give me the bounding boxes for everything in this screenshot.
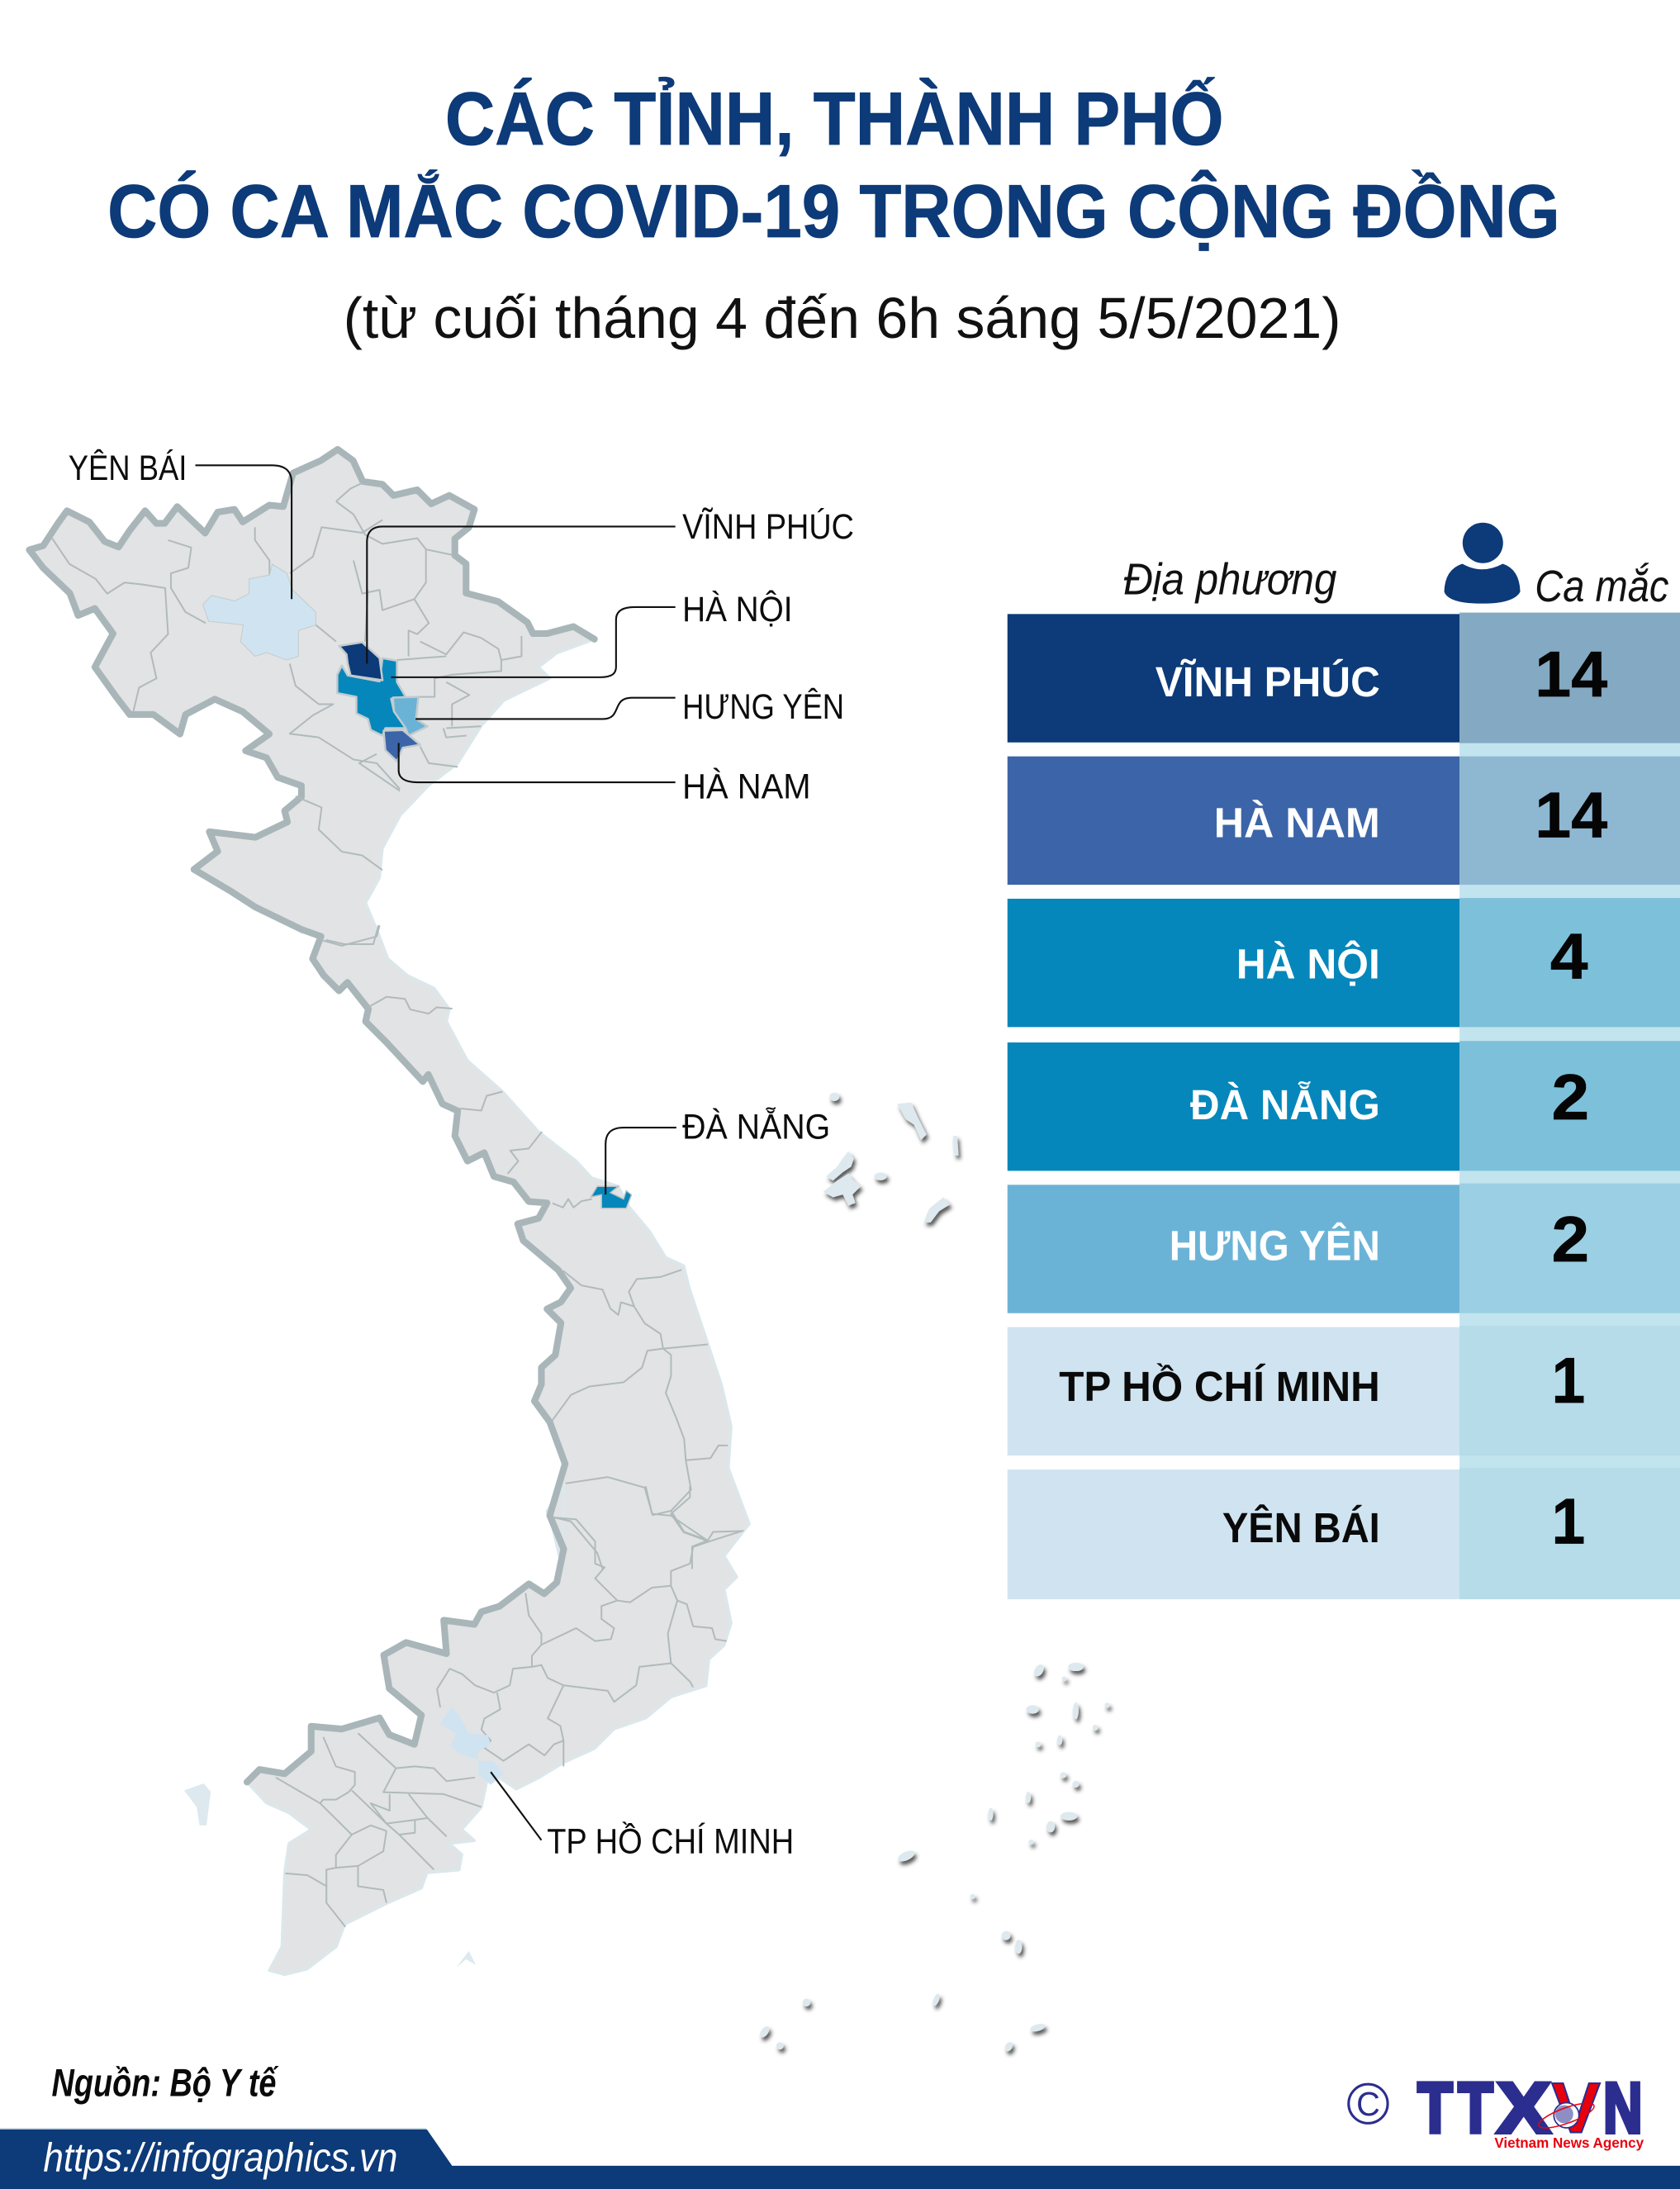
map labels: TP HỒ CHÍ MINH: [547, 1821, 794, 1861]
province: TP Hồ Chí Minh: [440, 1707, 504, 1785]
Phu Quoc and Con Dao islands: [184, 1783, 476, 1968]
footer bar: [0, 2129, 1680, 2189]
province: Hưng Yên: [393, 697, 428, 735]
internal province lines north: [52, 483, 521, 946]
highlighted provinces north: [203, 564, 428, 762]
province: Hà Nam: [383, 730, 420, 762]
map labels: HƯNG YÊN: [682, 687, 844, 726]
map labels: VĨNH PHÚC: [682, 507, 854, 546]
row: Hưng Yên: 2: [1552, 1204, 1589, 1275]
count column background: [1459, 613, 1680, 1599]
province: Yên Bái: [203, 564, 316, 660]
title: [107, 77, 1560, 254]
row: Hà Nam: [1008, 757, 1680, 885]
islands: Trường Sa: [758, 1663, 1110, 2053]
footer bar: https://infographics.vn: [43, 2136, 397, 2181]
leader lines: [196, 465, 676, 1840]
logo TTXVN: T: [1458, 2068, 1493, 2148]
row: Yên Bái: YÊN BÁI: [1222, 1504, 1380, 1551]
subtitle: (từ cuối tháng 4 đến 6h sáng 5/5/2021): [344, 286, 1341, 350]
row: Đà Nẵng: ĐÀ NẴNG: [1190, 1081, 1380, 1128]
islands: Hoàng Sa: [823, 1093, 959, 1223]
map labels: YÊN BÁI: [69, 449, 187, 487]
row: TP Hồ Chí Minh: 1: [1552, 1346, 1585, 1417]
title: CÁC TỈNH, THÀNH PHỐ: [445, 77, 1224, 161]
title: CÓ CA MẮC COVID-19 TRONG CỘNG ĐỒNG: [107, 169, 1560, 254]
row: Vĩnh Phúc: VĨNH PHÚC: [1156, 658, 1380, 705]
logo TTXVN: T: [1417, 2068, 1453, 2148]
table header: Địa phương: Địa phương: [1123, 555, 1336, 605]
row: Vĩnh Phúc: 14: [1535, 639, 1607, 710]
logo caption: Vietnam News Agency: [1494, 2134, 1644, 2151]
internal province lines centre: [326, 925, 743, 1569]
row: Đà Nẵng: 2: [1552, 1062, 1589, 1133]
row: Hà Nội: 4: [1550, 921, 1588, 992]
internal province lines south: [276, 1486, 743, 1927]
map labels: HÀ NỘI: [682, 590, 793, 629]
row: Hà Nội: HÀ NỘI: [1236, 940, 1380, 987]
row: Hà Nam: HÀ NAM: [1214, 800, 1380, 847]
icon: person: [1444, 523, 1521, 604]
row: Yên Bái: [1008, 1468, 1680, 1599]
province: Đà Nẵng: [591, 1186, 632, 1208]
copyright symbol: C: [1356, 2085, 1380, 2123]
row: Hưng Yên: [1008, 1184, 1680, 1313]
map labels: HÀ NAM: [682, 767, 811, 805]
row: TP Hồ Chí Minh: TP HỒ CHÍ MINH: [1059, 1363, 1380, 1410]
map of Vietnam: [29, 449, 1110, 2053]
land border: [29, 449, 595, 1782]
row: Hà Nội: [1008, 898, 1680, 1027]
row: Vĩnh Phúc: [1008, 613, 1680, 743]
logo TTXVN: V: [1552, 2068, 1601, 2148]
row: Hưng Yên: HƯNG YÊN: [1170, 1223, 1380, 1270]
land mass: [29, 449, 749, 1974]
row: Yên Bái: 1: [1552, 1486, 1585, 1557]
row: TP Hồ Chí Minh: [1008, 1326, 1680, 1455]
logo TTXVN: [1417, 2068, 1642, 2148]
table: [1008, 613, 1680, 1599]
logo TTXVN: X: [1497, 2068, 1550, 2148]
source: Nguồn: Bộ Y tế: [52, 2061, 279, 2105]
globe: [1536, 2098, 1597, 2133]
copyright symbol: [1349, 2084, 1388, 2123]
province: Vĩnh Phúc: [339, 643, 382, 681]
row: Đà Nẵng: [1008, 1041, 1680, 1170]
row: Hà Nam: 14: [1535, 781, 1607, 852]
map labels: ĐÀ NẴNG: [682, 1108, 830, 1147]
province: Hà Nội: [337, 658, 409, 735]
map labels: [69, 449, 854, 1861]
logo TTXVN: N: [1603, 2068, 1642, 2148]
